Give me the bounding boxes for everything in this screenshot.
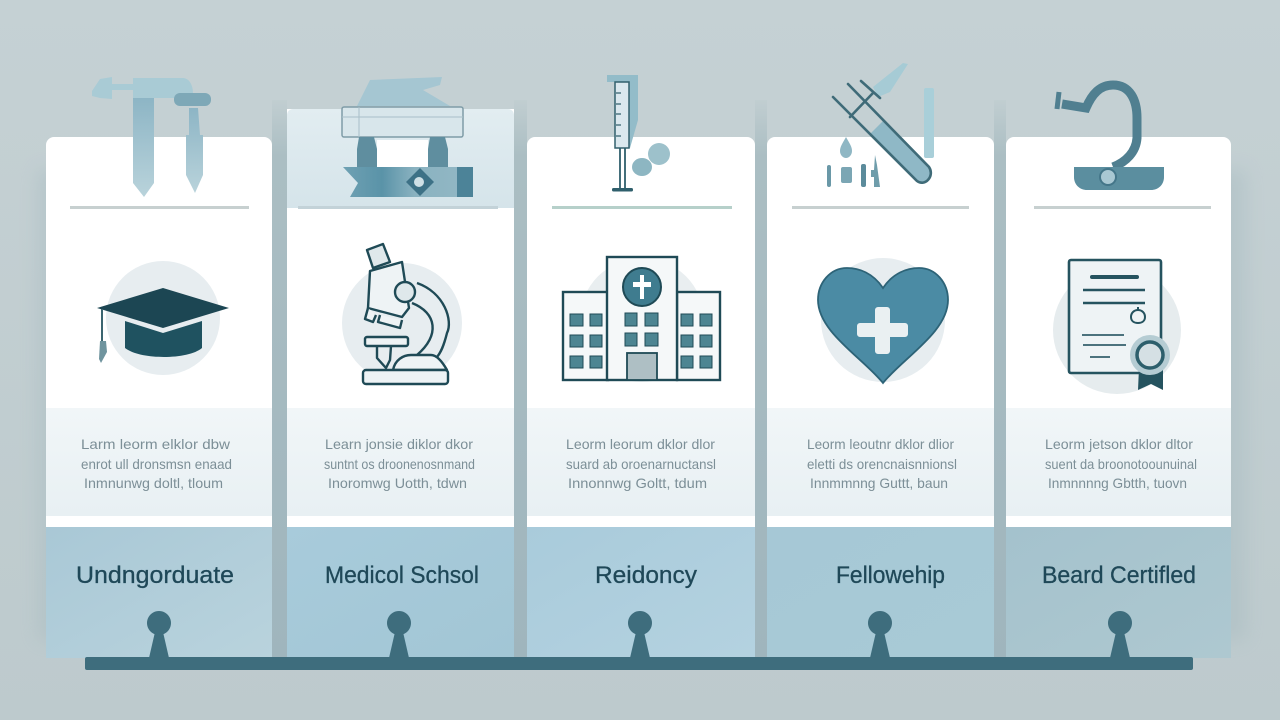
body text: Inoromwg Uotth, tdwn	[328, 475, 467, 491]
text area	[1006, 408, 1231, 516]
seal ribbon	[1138, 368, 1163, 390]
body text: Inmnnnng Gbtth, tuovn	[1048, 475, 1187, 491]
panel: Undergraduate	[46, 77, 272, 658]
body text: Learn jonsie diklor dkor	[325, 436, 473, 452]
body text: Leorm leorum dklor dlor	[566, 436, 715, 452]
body text: Leorm jetson dklor dltor	[1045, 436, 1193, 452]
body text: eletti ds orencnaisnnionsl	[807, 456, 957, 472]
icon: certificate	[1053, 260, 1181, 394]
card body	[287, 109, 514, 527]
body text: suard ab oroenarnuctansl	[566, 456, 716, 472]
text area	[287, 408, 514, 516]
body text	[324, 436, 475, 491]
label band	[527, 527, 755, 658]
body text	[1045, 436, 1197, 491]
heading: Reidoncy	[595, 562, 697, 589]
heading: Medicol Schsol	[325, 562, 479, 589]
card body	[46, 137, 272, 527]
body text: Innmmnng Guttt, baun	[810, 475, 948, 491]
card body	[767, 137, 994, 527]
icon: test tube and instruments	[827, 63, 934, 187]
seal rosette	[1130, 335, 1170, 375]
icon: hospital	[563, 257, 720, 382]
panel: Residency	[527, 75, 755, 658]
panel: Medical School	[287, 77, 514, 658]
marker 1	[147, 611, 171, 658]
label band	[1006, 527, 1231, 658]
body text: suent da broonotoounuinal	[1045, 456, 1197, 472]
card body	[527, 137, 755, 527]
body text	[81, 436, 232, 491]
icon: microscope	[342, 244, 462, 384]
icon: graduation cap	[97, 261, 229, 375]
card body	[1006, 137, 1231, 527]
label band	[287, 527, 514, 658]
panel: Fellowship	[767, 63, 994, 658]
hospital door	[627, 353, 657, 380]
timeline bar	[85, 657, 1193, 670]
icon: test tube and scalpel	[92, 77, 211, 197]
body text: Leorm leoutnr dklor dlior	[807, 436, 954, 452]
icon: heart with cross	[818, 258, 948, 383]
body text: Inmnunwg doltl, tloum	[84, 475, 223, 491]
icon: stethoscope	[1057, 85, 1164, 190]
header tint	[287, 109, 514, 208]
body text: suntnt os droonenosnmand	[324, 456, 475, 472]
marker 2	[387, 611, 411, 658]
heading: Fellowehip	[836, 562, 945, 589]
heading: Beard Certifled	[1042, 562, 1196, 589]
panel: Board Certified	[1006, 85, 1231, 658]
label band	[46, 527, 272, 658]
body text	[807, 436, 957, 491]
marker 5	[1108, 611, 1132, 658]
icon: book stack and ribbon	[342, 77, 473, 197]
label band	[767, 527, 994, 658]
marker 3	[628, 611, 652, 658]
text area	[527, 408, 755, 516]
medical cross	[857, 307, 908, 354]
icon: syringe and pills	[607, 75, 670, 192]
body text	[566, 436, 716, 491]
text area	[46, 408, 272, 516]
timeline	[85, 611, 1193, 670]
body text: Larm leorm elklor dbw	[81, 436, 231, 452]
body text: enrot ull dronsmsn enaad	[81, 456, 232, 472]
marker 4	[868, 611, 892, 658]
body text: Innonnwg Goltt, tdum	[568, 475, 707, 491]
heading: Undngorduate	[76, 562, 234, 589]
text area	[767, 408, 994, 516]
